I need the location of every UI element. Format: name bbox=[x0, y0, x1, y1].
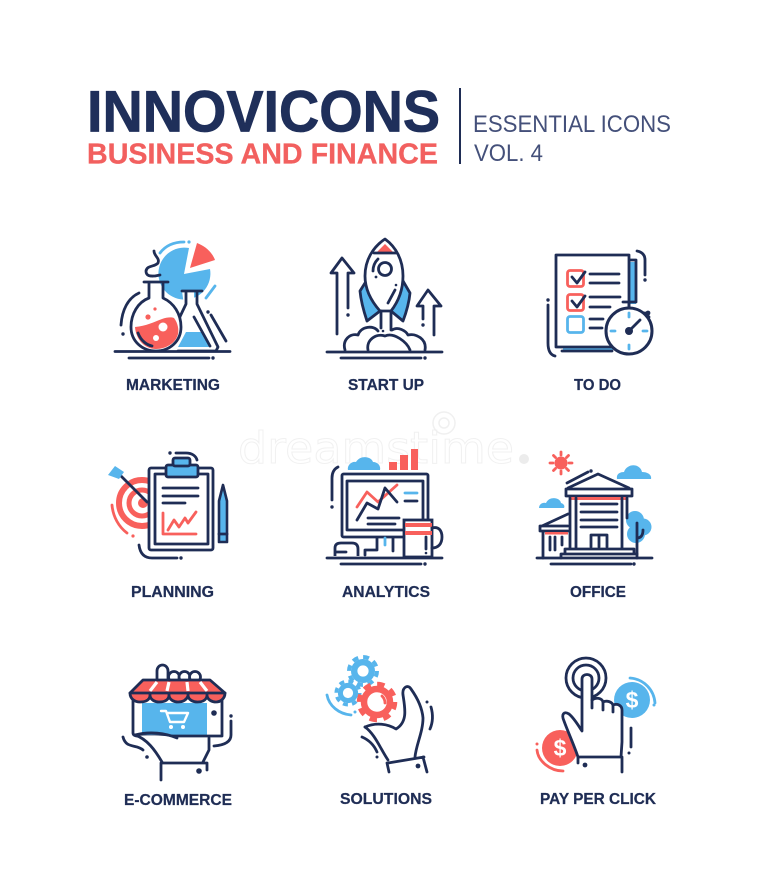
panel: to do bbox=[546, 251, 652, 394]
watermark: dreamstime bbox=[238, 423, 514, 474]
label: ANALYTICS bbox=[342, 584, 430, 601]
icon: checklist and stopwatch bbox=[546, 251, 652, 356]
panel: planning bbox=[108, 451, 227, 601]
label: PAY PER CLICK bbox=[540, 791, 656, 808]
volume: VOL. 4 bbox=[474, 140, 543, 167]
title: INNOVICONS bbox=[87, 80, 440, 144]
label: PLANNING bbox=[131, 584, 214, 601]
label: OFFICE bbox=[570, 584, 626, 601]
icon: flasks and pie chart bbox=[121, 240, 226, 352]
icon: rocket and arrows bbox=[331, 239, 441, 350]
panel: start up bbox=[327, 239, 442, 394]
label: E-COMMERCE bbox=[124, 792, 232, 809]
panel: analytics bbox=[327, 449, 442, 601]
label: SOLUTIONS bbox=[340, 791, 432, 808]
panel: marketing bbox=[115, 240, 230, 394]
subtitle: BUSINESS AND FINANCE bbox=[87, 138, 438, 170]
label: MARKETING bbox=[126, 377, 220, 394]
icon: finger clicking with coins bbox=[536, 658, 656, 772]
ground lines bbox=[327, 558, 442, 566]
label: START UP bbox=[348, 377, 424, 394]
ground lines bbox=[327, 352, 442, 360]
header bbox=[87, 80, 671, 170]
panel: office bbox=[537, 452, 652, 601]
icon: finger clicking with coins: $ bbox=[554, 735, 567, 761]
panel: pay per click bbox=[536, 658, 656, 808]
icon: office building bbox=[539, 452, 652, 558]
ground lines bbox=[537, 558, 652, 566]
panel: solutions bbox=[327, 657, 432, 808]
series name: ESSENTIAL ICONS bbox=[473, 111, 671, 138]
icon: finger clicking with coins: $ bbox=[626, 687, 639, 713]
ground lines bbox=[115, 352, 230, 360]
icon: gears in hand bbox=[327, 657, 432, 772]
header divider bbox=[459, 88, 461, 164]
icon: shop on phone in hand bbox=[123, 665, 233, 780]
panel: e-commerce bbox=[123, 665, 233, 809]
icon: monitor, chart and mug bbox=[330, 449, 442, 557]
label: TO DO bbox=[574, 377, 621, 394]
icon: clipboard, target and pencil bbox=[108, 451, 227, 560]
